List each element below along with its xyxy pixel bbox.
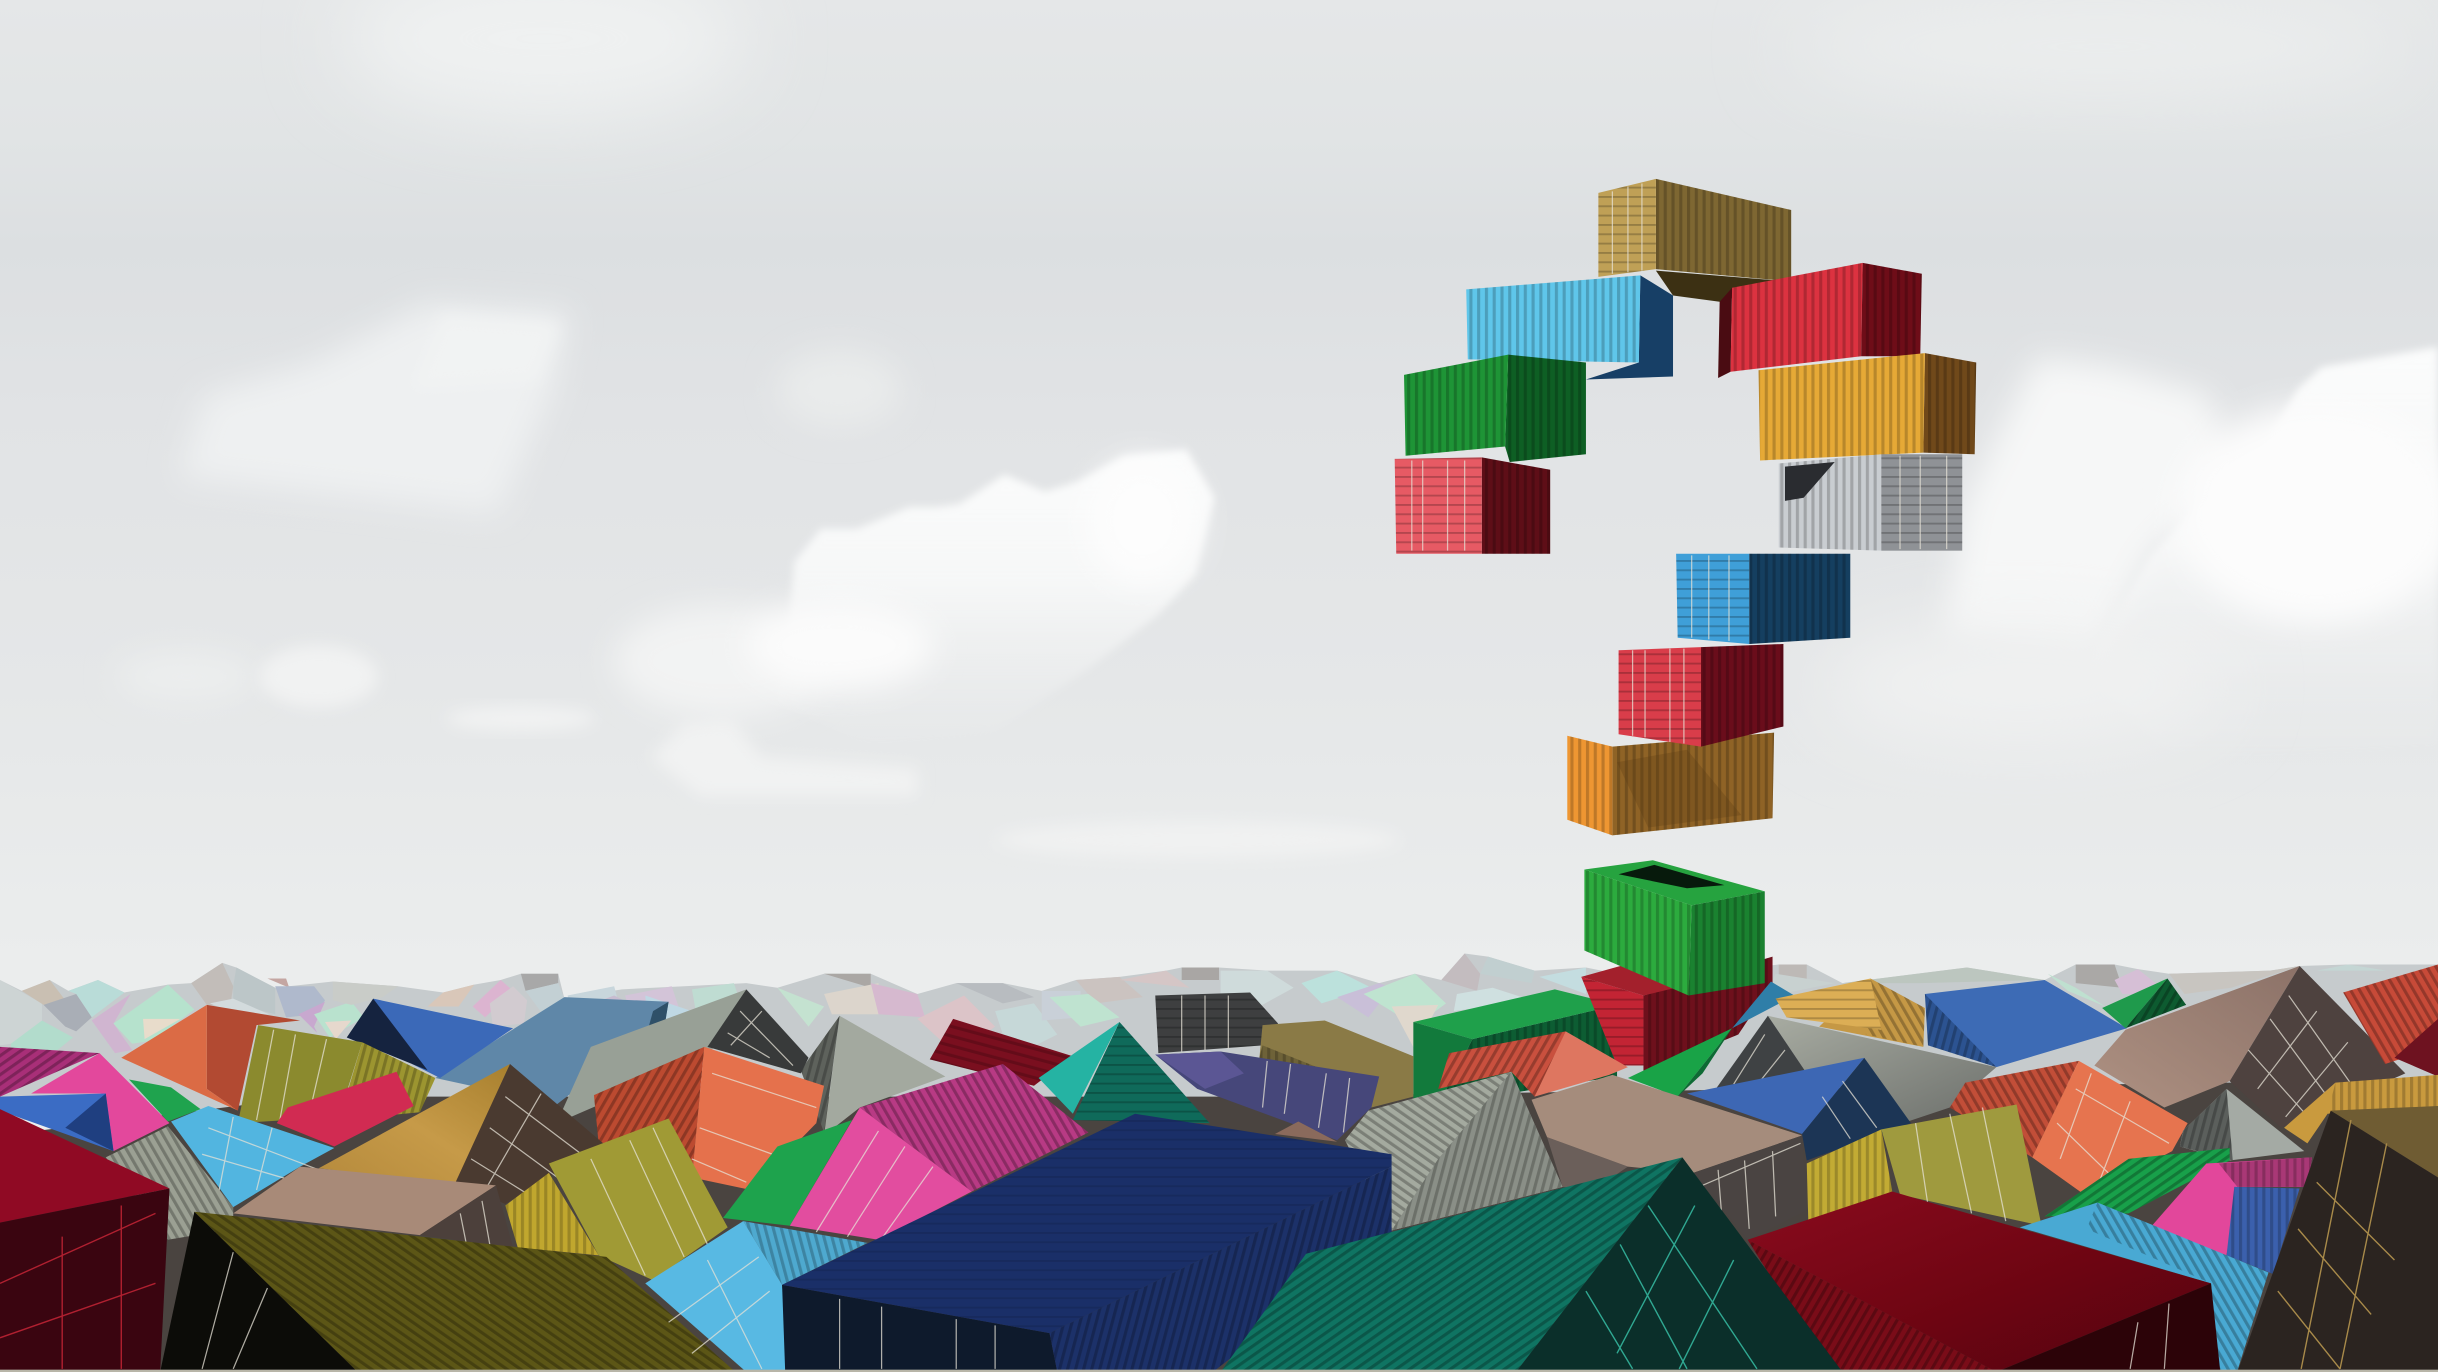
container: crimson large (1748, 1192, 2220, 1372)
container: olive (238, 1025, 435, 1123)
container: green low (1413, 989, 1617, 1108)
container: grey wide (1710, 1016, 1996, 1122)
container: orange and brown (1567, 733, 1774, 835)
container: red base of question mark (1581, 957, 1773, 1073)
container: salmon red hook end (1395, 457, 1550, 554)
question mark of floating containers (1395, 179, 1976, 835)
container: yellow right (1759, 353, 1976, 460)
container: orange far right (2343, 964, 2438, 1076)
container: orange big centre left (594, 1047, 824, 1190)
container: tan large right (2094, 966, 2405, 1128)
container: teal far (1039, 1022, 1210, 1123)
container: red pink small (277, 1072, 414, 1146)
container: light blue lower (645, 1221, 868, 1372)
container: small tan piece (1275, 1122, 1337, 1142)
container: steel blue (435, 997, 669, 1104)
container: grey small right (2180, 1089, 2304, 1160)
container: blue small right (2227, 1187, 2300, 1274)
container: dark grey distant (1155, 992, 1278, 1053)
container: orange top left (121, 1005, 300, 1111)
container: dark red small (930, 1019, 1073, 1086)
container: grey green with dark door (557, 989, 809, 1123)
container: grey left (106, 1126, 233, 1240)
container: top tan (1598, 179, 1791, 302)
container: navy large (782, 1114, 1392, 1372)
container: dark red corner (0, 1109, 169, 1372)
container: pink left (0, 1047, 169, 1151)
bottom edge strip (0, 1370, 2438, 1372)
container: white and grey (1779, 454, 1962, 551)
container: green upper left (1404, 355, 1586, 462)
container: blue left (0, 1094, 114, 1151)
container: green tall (723, 1120, 852, 1226)
container: dark brown corner (2237, 1106, 2438, 1372)
container: salmon low (1438, 1031, 1628, 1097)
container: pink big (790, 1064, 1088, 1240)
container: olive tan (1259, 1020, 1413, 1108)
container: small green top right (2102, 978, 2186, 1028)
container: green right (2045, 1148, 2230, 1216)
container: blue top right (1925, 980, 2127, 1067)
container: red upper right (1718, 263, 1922, 378)
left foreground containers (0, 989, 1842, 1372)
container: light blue right (2020, 1202, 2269, 1370)
container: steel blue shard (1732, 982, 1794, 1028)
container: tan flat (233, 1167, 513, 1248)
far right foreground containers (1155, 860, 2438, 1372)
container: teal large (1221, 1157, 1842, 1372)
container: tan centre right (1532, 1075, 1807, 1240)
container: light blue (1466, 275, 1673, 380)
container: green small left (129, 1080, 201, 1122)
container: purple (1155, 1052, 1379, 1140)
container: pink right (2152, 1157, 2312, 1255)
container: green diagonal (1628, 1028, 1732, 1097)
container: olive yellow front (505, 1118, 728, 1280)
container: blue stem (1676, 554, 1850, 644)
container: gold and brown (319, 1064, 603, 1204)
base behind the foreground containers (0, 1081, 2438, 1372)
container: pale grey ribbed (1345, 1072, 1563, 1230)
container: gold right edge (2284, 1075, 2438, 1143)
container: red stem (1619, 644, 1783, 747)
container: yellow olive right (1807, 1104, 2042, 1226)
container: navy blue far left (347, 999, 513, 1078)
distant faded containers skyline (0, 954, 2438, 1120)
container: pale grey far (801, 1016, 945, 1136)
clouds (117, 0, 2438, 859)
container: grey door blue (1687, 1058, 1911, 1160)
container: dark olive large (160, 1212, 735, 1372)
container: green falling open (1584, 860, 1765, 996)
container: light blue left (171, 1106, 334, 1207)
container: orange large right (1950, 1061, 2188, 1196)
container: gold (1776, 978, 1925, 1047)
